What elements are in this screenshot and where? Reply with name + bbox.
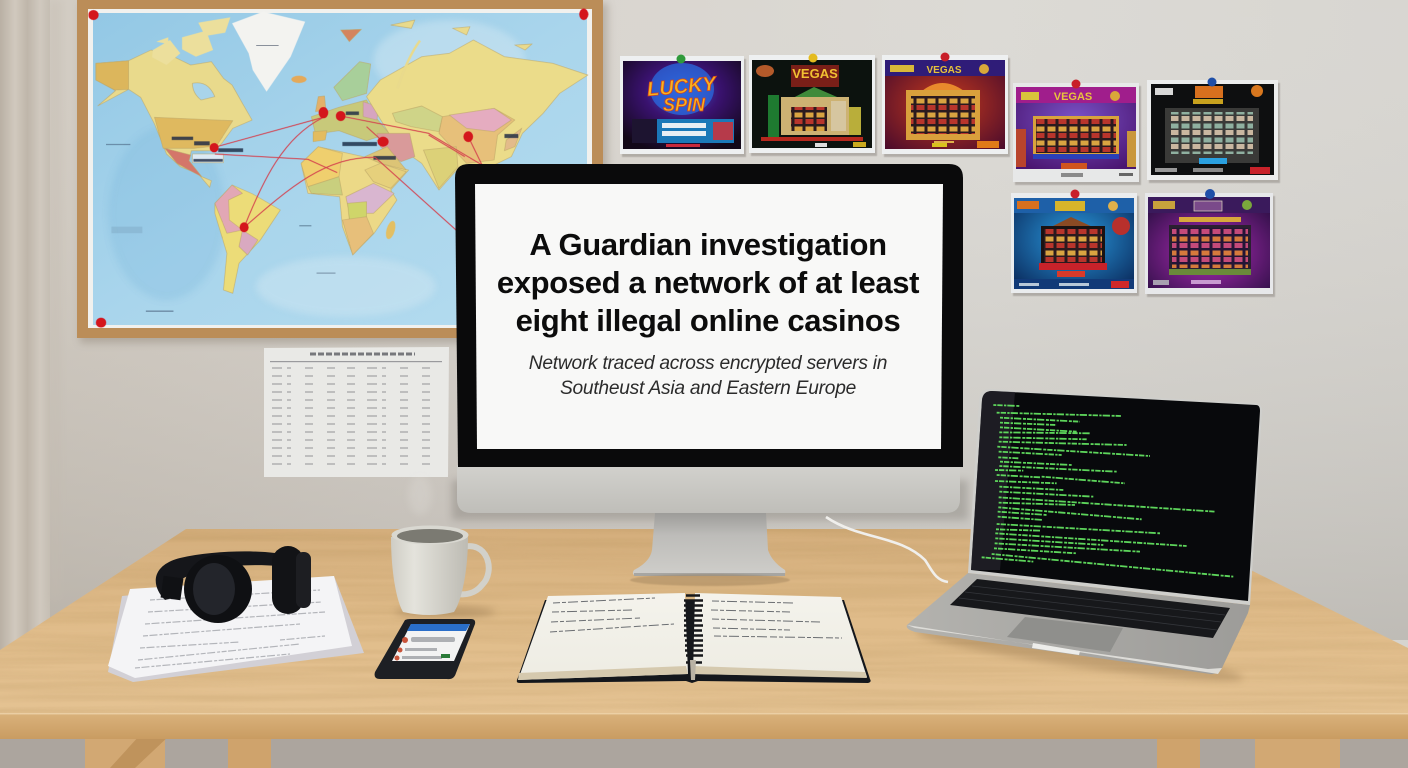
monitor [452,164,968,586]
stack of papers [108,576,364,682]
trackpad [1007,617,1123,652]
asia [365,20,588,190]
headline [497,227,919,338]
red pins [88,9,588,328]
poster: lucky spin [620,56,746,157]
north america [96,17,252,187]
poster: lucky spin: LUCKY [646,73,718,101]
pinned data sheet [264,347,449,477]
monitor chin [457,465,960,513]
subheading [529,353,887,399]
south america [215,185,280,293]
poster: lucky spin: SPIN [663,95,706,115]
desk [0,529,1408,768]
subheading: Southeust Asia and Eastern Europe [560,378,856,399]
spiral notebook [517,593,871,683]
red strings [214,116,482,232]
headphones [156,546,311,623]
poster: blue slots [1011,193,1139,296]
smartphone [375,619,475,679]
map labels [106,45,518,312]
monitor stand [630,513,790,586]
world map with pins and strings [77,0,608,343]
monitor shadow [452,480,968,520]
laptop base [907,573,1250,674]
poster: purple slots: VEGAS [1054,91,1092,103]
keyboard [950,579,1230,638]
poster: vegas red: VEGAS [926,65,962,76]
poster: vegas red [882,55,1010,157]
laptop [907,389,1262,690]
desk top [0,529,1408,714]
casino posters [620,52,1280,297]
handwritten notes [550,598,842,638]
monitor screen [475,184,943,449]
notebook spiral binding [684,596,703,662]
desk front edge [0,714,1408,739]
headline: A Guardian investigation [529,227,887,262]
poster pins [676,52,1216,199]
terminal code lines [982,405,1233,577]
poster: vegas green: VEGAS [792,66,838,81]
headline: eight illegal online casinos [516,303,900,338]
coffee mug with steam [391,475,495,618]
africa [301,147,409,255]
curtain [0,0,62,650]
laptop lid [968,389,1262,605]
subheading: Network traced across encrypted servers in [529,353,887,374]
wood grain [0,529,1408,714]
iceland [291,76,307,83]
poster: black slots [1147,80,1280,183]
monitor bezel [455,164,963,467]
poster: vegas green [749,55,877,156]
poster: violet slots [1145,193,1275,297]
poster: purple slots [1013,83,1141,185]
europe [311,29,389,142]
power cable [826,517,948,582]
headline: exposed a network of at least [497,265,919,300]
greenland [232,12,305,92]
desk legs [85,735,1340,768]
